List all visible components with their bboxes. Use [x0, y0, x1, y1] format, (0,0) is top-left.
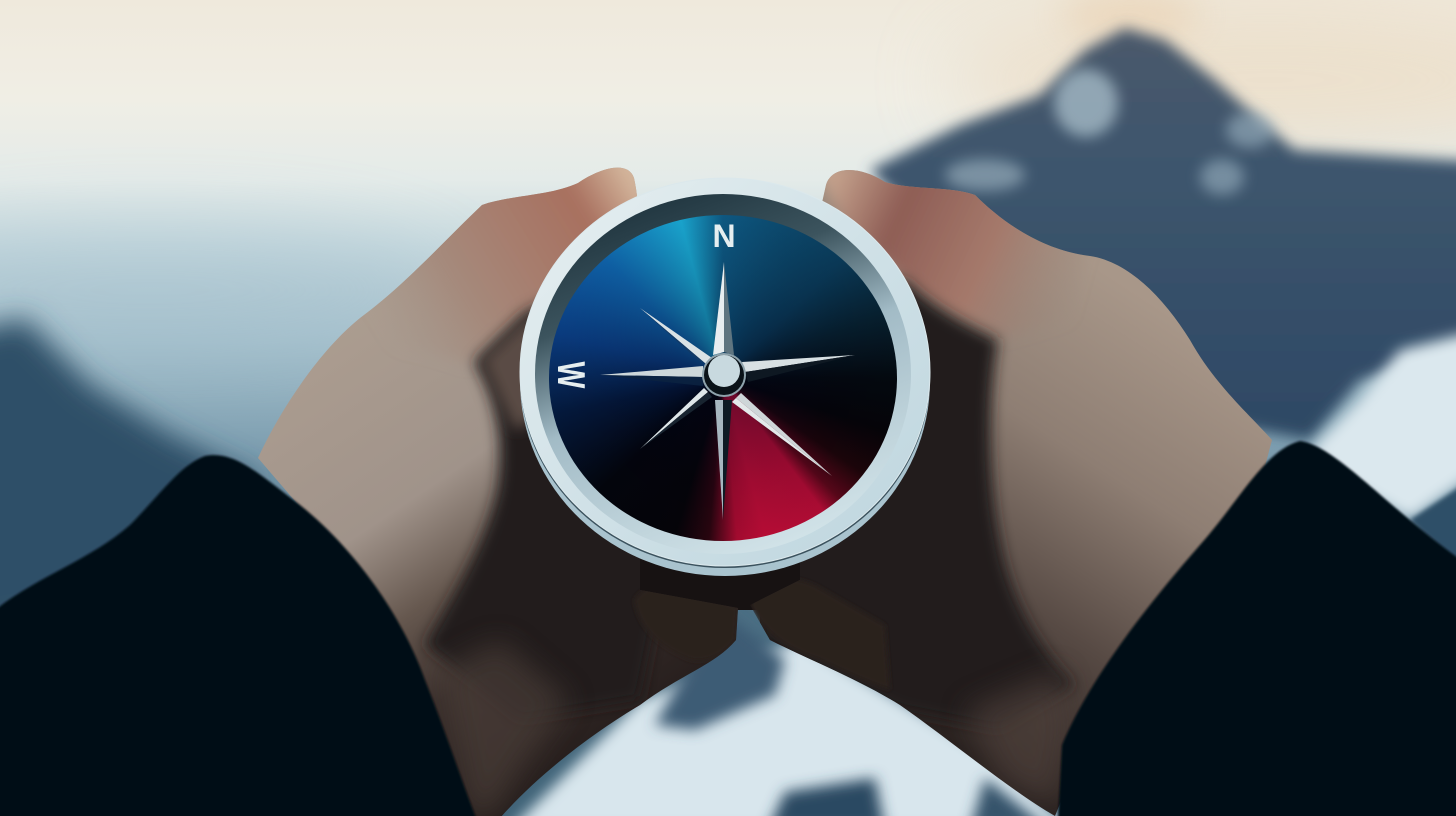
thumb	[394, 168, 637, 354]
left hand	[258, 168, 738, 816]
dark rock right edge	[1410, 480, 1456, 580]
palm fold shadow	[420, 296, 651, 710]
snow bottom centre	[510, 610, 1070, 816]
right sleeve	[1058, 441, 1456, 816]
right mountain	[870, 28, 1456, 440]
left sleeve	[0, 455, 477, 816]
compass rose	[600, 262, 855, 520]
letter N: N	[712, 218, 736, 254]
lower wrist	[966, 671, 1064, 801]
left distant mountain	[0, 318, 260, 640]
palm fold shadow	[760, 280, 1075, 730]
left fingertip	[638, 592, 738, 656]
right hand	[750, 170, 1272, 816]
lower palm	[452, 640, 568, 814]
thumb	[824, 170, 1065, 322]
compass dial	[549, 215, 897, 541]
right fingertip	[750, 578, 890, 690]
palm behind thumb	[483, 318, 528, 434]
dark gap between the hands under compass	[620, 520, 830, 610]
centre pivot	[702, 353, 746, 397]
compass casing	[520, 178, 930, 576]
letter W: W	[549, 362, 592, 389]
snow patch right	[1310, 330, 1456, 520]
